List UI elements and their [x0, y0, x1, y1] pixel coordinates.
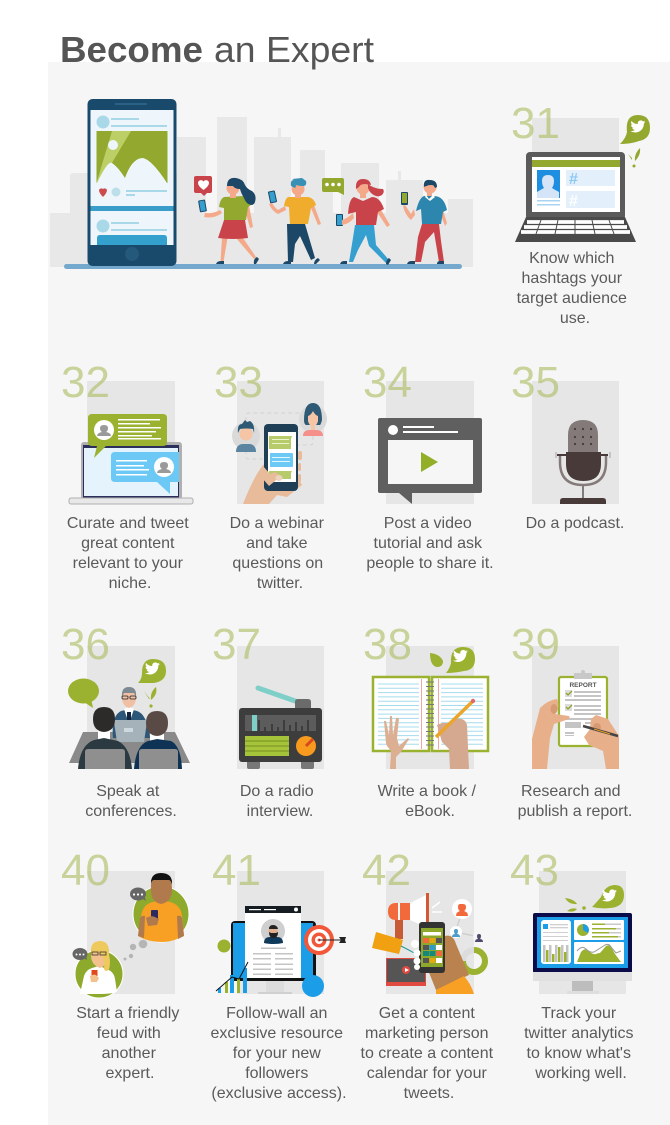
item 42: [361, 846, 497, 1102]
text 33: twitter.: [257, 575, 303, 592]
item 43: [510, 846, 638, 1082]
icon: open book and hands: [373, 646, 488, 769]
text 34: tutorial and ask: [374, 535, 483, 552]
text 40: Start a friendly: [76, 1005, 179, 1022]
text 43: working well.: [534, 1065, 627, 1082]
icon: microphone: [532, 381, 619, 504]
title: Become: [60, 29, 203, 70]
text 33: Do a webinar: [230, 515, 325, 532]
text 39: publish a report.: [518, 803, 632, 820]
item 38: [363, 620, 488, 820]
icon: laptop with hashtags: #: [569, 193, 578, 210]
text 42: Get a content: [379, 1005, 475, 1022]
number 39: 39: [511, 620, 560, 669]
item 39: [511, 620, 632, 820]
icon: report clipboard: [532, 646, 619, 769]
icon: laptop with hashtags: [515, 115, 650, 242]
number 32: 32: [61, 358, 110, 407]
text 31: hashtags your: [522, 270, 623, 287]
icon: content marketing: [372, 871, 485, 994]
icon: radio: [237, 646, 324, 769]
text 41: Follow-wall an: [226, 1005, 327, 1022]
ground bar: [64, 264, 462, 269]
number 37: 37: [212, 620, 261, 669]
text 36: Speak at: [96, 783, 160, 800]
man in yellow top: [268, 178, 321, 264]
icon: conference speaker: [68, 646, 190, 769]
icon: laptop with hashtags: #: [569, 171, 578, 188]
number 38: 38: [363, 620, 412, 669]
text 37: interview.: [247, 803, 313, 820]
large phone: [88, 99, 176, 266]
text 43: Track your: [541, 1005, 617, 1022]
item 35: [511, 358, 624, 532]
text 40: feud with: [97, 1025, 161, 1042]
text 31: target audience: [517, 290, 627, 307]
icon: laptop with chat bubbles: [69, 381, 193, 504]
text 32: great content: [81, 535, 175, 552]
text 34: people to share it.: [366, 555, 494, 572]
text 33: and take: [246, 535, 308, 552]
item 33: [214, 358, 328, 592]
item 41: [211, 846, 347, 1102]
text 33: questions on: [232, 555, 323, 572]
text 40: another: [102, 1045, 157, 1062]
text 31: use.: [560, 310, 590, 327]
text 41: exclusive resource: [211, 1025, 343, 1042]
text 36: conferences.: [85, 803, 177, 820]
text 43: to know what's: [527, 1045, 631, 1062]
text 41: (exclusive access).: [211, 1085, 347, 1102]
text 34: Post a video: [384, 515, 472, 532]
item 37: [212, 620, 324, 820]
item 36: [61, 620, 190, 820]
text 43: twitter analytics: [524, 1025, 633, 1042]
text 38: eBook.: [405, 803, 455, 820]
number 31: 31: [511, 99, 560, 148]
text 41: followers: [245, 1065, 308, 1082]
title: [60, 29, 374, 70]
text 31: Know which: [529, 250, 614, 267]
title: an Expert: [214, 29, 374, 70]
green typing bubble: [322, 178, 344, 195]
icon: webinar phone in hand: [232, 381, 327, 504]
icon: analytics monitor: [533, 871, 632, 994]
item 34: [363, 358, 494, 572]
city skyline: [50, 117, 473, 267]
number 43: 43: [510, 846, 559, 895]
number 34: 34: [363, 358, 412, 407]
text 39: Research and: [521, 783, 621, 800]
text 40: expert.: [106, 1065, 154, 1082]
hero illustration: phone and people walking: [50, 99, 473, 269]
text 37: Do a radio: [240, 783, 314, 800]
text 42: tweets.: [404, 1085, 454, 1102]
text 32: relevant to your: [73, 555, 184, 572]
text 42: to create a content: [361, 1045, 494, 1062]
text 32: Curate and tweet: [67, 515, 189, 532]
number 40: 40: [61, 846, 110, 895]
text 38: Write a book /: [378, 783, 477, 800]
woman in green top: [198, 178, 259, 264]
text 41: for your new: [233, 1045, 321, 1062]
heart bubble: [194, 176, 212, 196]
text 42: calendar for your: [367, 1065, 487, 1082]
number 36: 36: [61, 620, 110, 669]
item 31: [511, 99, 650, 327]
item 40: [61, 846, 189, 1082]
text 42: marketing person: [365, 1025, 489, 1042]
number 33: 33: [214, 358, 263, 407]
text 32: niche.: [109, 575, 151, 592]
number 41: 41: [212, 846, 261, 895]
woman in red top: [336, 179, 391, 265]
icon: exclusive resource monitor: [216, 871, 346, 997]
text 35: Do a podcast.: [526, 515, 624, 532]
number 35: 35: [511, 358, 560, 407]
item 32: [61, 358, 193, 592]
icon: report clipboard: REPORT: [569, 682, 597, 689]
number 42: 42: [362, 846, 411, 895]
icon: two people feuding: [72, 871, 189, 998]
man in blue sweater: [401, 180, 447, 264]
icon: video player: [378, 381, 482, 504]
icon: twitter bubble: [620, 115, 650, 168]
